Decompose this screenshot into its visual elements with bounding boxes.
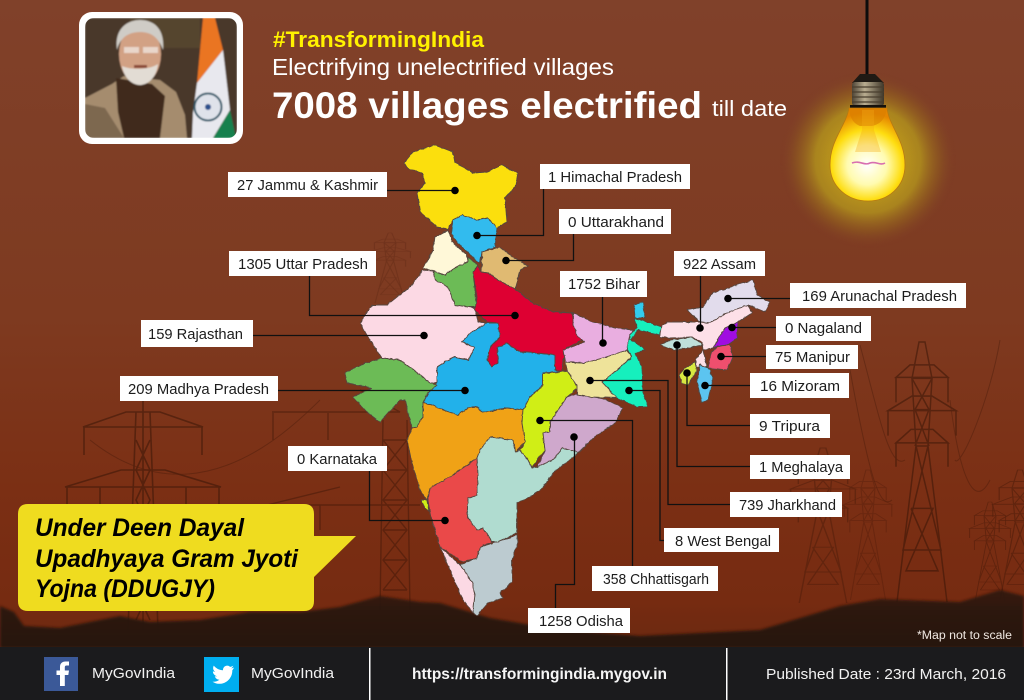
header: hashtag: #TransformingIndia: [273, 27, 485, 52]
label: Assam: [674, 251, 765, 332]
state: Karnataka: [428, 458, 492, 562]
state: Tamil Nadu: [460, 535, 518, 616]
state: Kerala: [440, 547, 475, 613]
label: Chhattisgarh: [536, 417, 718, 591]
footer bar: [0, 647, 1024, 700]
state: Uttarakhand: [481, 247, 528, 289]
state: Jammu and Kashmir: [404, 145, 518, 229]
callout: DDUGJY scheme: Under Deen Dayal: [35, 514, 245, 542]
state: Nagaland: [713, 322, 738, 348]
label: Jammu and Kashmir: [228, 172, 459, 197]
background: dark tree-line ground: [0, 590, 1024, 648]
state: Arunachal Pradesh: [687, 280, 770, 323]
state: Maharashtra: [407, 403, 525, 500]
label: Jammu and Kashmir: 27 Jammu & Kashmir: [237, 177, 378, 194]
label: Meghalaya: 1 Meghalaya: [759, 459, 844, 476]
state: Jharkhand: [565, 350, 632, 398]
footer: Twitter handle: MyGovIndia: [251, 665, 335, 682]
state: Rajasthan: [360, 270, 487, 384]
state: Haryana: [433, 257, 478, 307]
label: Madhya Pradesh: [120, 376, 469, 401]
state: Andhra Pradesh: [467, 437, 578, 542]
state: Assam: [660, 305, 752, 367]
label: Odisha: 1258 Odisha: [539, 613, 624, 630]
label: Karnataka: 0 Karnataka: [297, 451, 378, 468]
label: Nagaland: 0 Nagaland: [785, 320, 862, 337]
label: Mizoram: [701, 373, 849, 398]
label: Karnataka: [288, 446, 449, 524]
callout: DDUGJY scheme: Yojna (DDUGJY): [35, 575, 215, 603]
state: Tripura: [679, 362, 697, 385]
header: subtitle: Electrifying unelectrified villages: [272, 54, 614, 80]
label: Uttarakhand: 0 Uttarakhand: [568, 214, 664, 231]
label: Himachal Pradesh: [473, 164, 690, 239]
label: Assam: 922 Assam: [683, 256, 756, 273]
label: Uttarakhand: [502, 209, 671, 264]
footer: published date: Published Date : 23rd March, 2016: [766, 666, 1006, 683]
state: Sikkim: [634, 302, 645, 318]
state: Punjab: [423, 230, 468, 275]
footer: website URL: https://transformingindia.mygov.in: [412, 666, 667, 683]
label: Arunachal Pradesh: [724, 283, 966, 308]
callout: DDUGJY scheme: [18, 504, 356, 611]
label: Nagaland: [728, 316, 871, 341]
label: Jharkhand: [586, 377, 842, 517]
header: portrait photo frame: [79, 12, 243, 144]
label: Manipur: [717, 345, 858, 369]
label: Rajasthan: 159 Rajasthan: [148, 326, 243, 343]
label: Jharkhand: 739 Jharkhand: [739, 497, 836, 514]
label: Rajasthan: [141, 320, 428, 347]
callout: DDUGJY scheme: Upadhyaya Gram Jyoti: [35, 545, 299, 573]
note: map not to scale: *Map not to scale: [917, 630, 1012, 642]
label: Chhattisgarh: 358 Chhattisgarh: [603, 571, 709, 588]
map of India by state: [345, 145, 770, 616]
state: Mizoram: [697, 364, 713, 402]
label: Bihar: [560, 271, 647, 347]
label: Odisha: [528, 433, 630, 633]
header: headline: 7008 villages electrified: [272, 85, 702, 126]
state: Madhya Pradesh: [423, 323, 562, 415]
label: Tripura: [683, 369, 830, 438]
icon: Twitter: [204, 657, 239, 692]
state: Goa: [421, 500, 429, 512]
photo: portrait with flag: [85, 18, 237, 138]
label: Meghalaya: [673, 341, 850, 479]
footer: Facebook handle: MyGovIndia: [92, 665, 176, 682]
state: Bihar: [563, 313, 633, 363]
label: West Bengal: 8 West Bengal: [675, 533, 771, 550]
label: Madhya Pradesh: 209 Madhya Pradesh: [128, 381, 269, 398]
state: Himachal Pradesh: [451, 215, 497, 263]
icon: Facebook: [44, 657, 78, 691]
state: Odisha: [537, 393, 623, 467]
label: Manipur: 75 Manipur: [775, 349, 850, 366]
header: till date: till date: [712, 96, 787, 121]
label: Himachal Pradesh: 1 Himachal Pradesh: [548, 169, 682, 186]
state: Chhattisgarh: [520, 370, 578, 468]
label: Uttar Pradesh: 1305 Uttar Pradesh: [238, 256, 368, 273]
label: Arunachal Pradesh: 169 Arunachal Pradesh: [802, 288, 957, 305]
state: Meghalaya: [660, 337, 703, 350]
label: Uttar Pradesh: [229, 251, 519, 319]
background: transmission towers: [65, 233, 1024, 630]
state: Uttar Pradesh: [473, 265, 582, 372]
state: West Bengal: [602, 318, 662, 407]
label: Mizoram: 16 Mizoram: [760, 378, 840, 395]
icon: glowing light bulb: [780, 0, 956, 248]
label: Bihar: 1752 Bihar: [568, 276, 640, 293]
state: Gujarat: [345, 358, 437, 428]
label: West Bengal: [625, 387, 779, 552]
label: Tripura: 9 Tripura: [759, 418, 821, 435]
state: Manipur: [708, 345, 733, 370]
